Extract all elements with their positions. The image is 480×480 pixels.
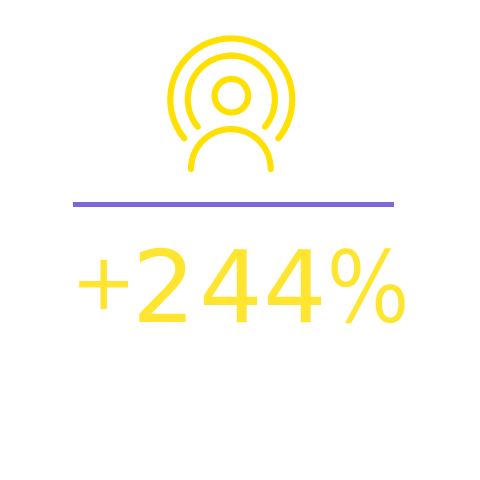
icon: person broadcasting signal bbox=[170, 38, 292, 169]
person shoulders bbox=[191, 129, 271, 169]
digit 2: 2 bbox=[132, 229, 196, 346]
person head bbox=[215, 79, 248, 112]
plus sign: + bbox=[71, 238, 136, 328]
divider bar bbox=[73, 202, 394, 207]
middle signal arc bbox=[188, 56, 275, 127]
digit 4: 4 bbox=[263, 229, 327, 346]
digit 4: 4 bbox=[199, 229, 263, 346]
percent sign: % bbox=[326, 231, 410, 346]
outer signal arc bbox=[170, 38, 292, 138]
statistic: +244% bbox=[71, 229, 410, 346]
